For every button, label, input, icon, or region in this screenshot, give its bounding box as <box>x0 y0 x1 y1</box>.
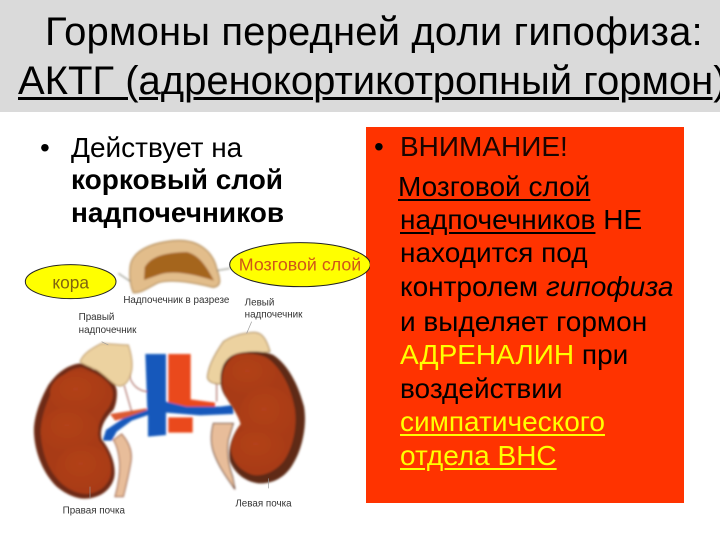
callout: кора <box>25 265 116 299</box>
callout: Мозговой слой <box>230 243 370 287</box>
vessels group <box>103 354 235 497</box>
icon: adrenal cross-section <box>118 240 230 293</box>
panel line 3: находится под <box>400 237 588 268</box>
left adrenal gland <box>207 332 270 384</box>
panel line 4: контролем гипофиза <box>400 271 674 302</box>
panel line 9: отдела ВНС <box>400 440 557 471</box>
icon: left kidney <box>207 332 305 483</box>
panel line 7: воздействии <box>400 373 563 404</box>
title line 1: Гормоны передней доли гипофиза: <box>45 10 703 54</box>
bullet: • <box>40 132 50 163</box>
left text line 1: Действует на <box>71 132 242 163</box>
callout: Мозговой слой: Мозговой слой <box>239 255 361 275</box>
right adrenal gland <box>80 343 132 386</box>
left text block <box>40 132 284 228</box>
label: right adrenal: надпочечник <box>79 325 137 336</box>
panel line 6: АДРЕНАЛИН при <box>400 339 628 370</box>
left text line 2: корковый слой <box>71 164 283 195</box>
left ureter <box>211 423 235 489</box>
vena cava and renal veins <box>103 354 233 441</box>
left text line 3: надпочечников <box>71 197 284 228</box>
red attention panel <box>366 127 684 503</box>
bullet: • <box>374 131 384 162</box>
label: left adrenal: Левый <box>245 297 274 308</box>
adrenal small vessels <box>124 372 217 413</box>
label: left kidney: Левая почка <box>235 498 292 509</box>
label: right kidney: Правая почка <box>63 506 125 517</box>
right ureter <box>113 434 131 497</box>
panel line 1: Мозговой слой <box>398 171 590 202</box>
callout: кора: кора <box>52 272 89 292</box>
heading: attention: ВНИМАНИЕ! <box>400 131 568 162</box>
adrenal and kidney illustration <box>24 238 370 517</box>
panel line 8: симпатического <box>400 406 605 437</box>
panel line 5: и выделяет гормон <box>400 306 647 337</box>
right renal artery <box>110 408 147 421</box>
label: left adrenal: надпочечник <box>245 310 303 321</box>
title band <box>0 0 720 112</box>
label: adrenal section: Надпочечник в разрезе <box>123 295 230 306</box>
aorta <box>168 354 215 433</box>
label: right adrenal: Правый <box>79 312 114 323</box>
label leader lines <box>90 322 268 498</box>
title line 2: АКТГ (адренокортикотропный гормон) <box>18 59 720 103</box>
icon: right kidney <box>34 343 132 499</box>
panel line 2: надпочечников НЕ <box>400 204 642 235</box>
illustration labels <box>63 295 303 517</box>
